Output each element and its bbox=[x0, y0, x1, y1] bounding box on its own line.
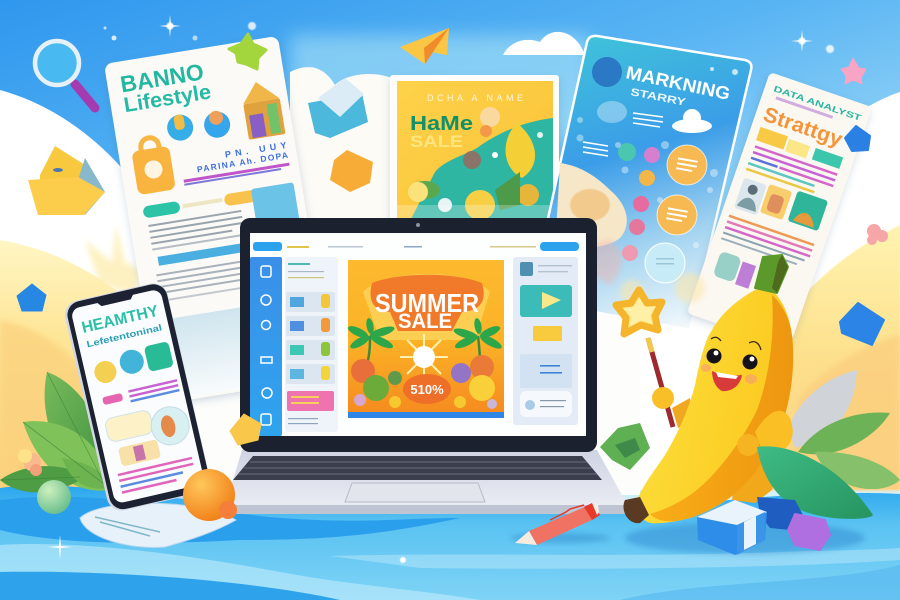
app sidebar bbox=[250, 257, 282, 436]
blue gem on poster bbox=[845, 126, 870, 151]
orange ball with knob bbox=[183, 469, 237, 521]
info circles bbox=[645, 145, 707, 283]
pencil bbox=[515, 503, 600, 545]
discount badge bbox=[403, 374, 451, 404]
phone diagrams bbox=[104, 401, 195, 468]
blue gift box bbox=[697, 500, 767, 555]
logo badge bbox=[592, 57, 622, 87]
phone body bbox=[62, 280, 213, 513]
green pen bbox=[757, 446, 873, 519]
poster: Marketing Starry: STARRY bbox=[629, 86, 687, 109]
banana stem bbox=[755, 255, 788, 293]
palm trees bbox=[346, 318, 503, 365]
app toolbar bbox=[253, 242, 579, 251]
summer sale poster bbox=[346, 260, 504, 418]
plant leaves on left bbox=[0, 372, 110, 492]
banana leg bbox=[732, 462, 775, 503]
floating blue envelope bbox=[308, 78, 368, 138]
pink star bbox=[841, 58, 866, 84]
floating paper plane bbox=[400, 28, 449, 64]
poster: Data Analyst Strategy bbox=[687, 72, 872, 348]
tablet header text: DCHA A NAME bbox=[427, 93, 523, 103]
banana end tip bbox=[623, 497, 649, 523]
illustration: tropical fruit bbox=[397, 107, 553, 221]
phone icons bbox=[91, 341, 174, 385]
phone stand bbox=[80, 503, 236, 547]
fruit bbox=[351, 355, 497, 409]
summer sale headline: SUMMER bbox=[375, 288, 479, 318]
green ball bbox=[37, 480, 71, 514]
phone coloured lines bbox=[100, 379, 199, 494]
tablet title: HaMe bbox=[410, 113, 473, 135]
green star bbox=[229, 34, 266, 69]
sparkles bbox=[48, 15, 834, 563]
banana body bbox=[638, 289, 793, 523]
summer sale poster: SALE bbox=[398, 310, 452, 333]
phone bbox=[62, 280, 236, 547]
icon: orange padlock bag bbox=[130, 135, 176, 195]
pale star blobs behind banana bbox=[620, 273, 705, 304]
discount badge: 510% bbox=[410, 382, 444, 397]
laptop base bbox=[222, 450, 636, 514]
poster subheading: PN. UUY bbox=[224, 140, 287, 160]
poster: BANNO Lifestyle: Lifestyle bbox=[122, 80, 213, 117]
banana face bbox=[701, 337, 761, 391]
floating orange gem bbox=[330, 150, 373, 192]
sun bbox=[400, 334, 448, 382]
banana shaded side bbox=[650, 295, 793, 521]
laptop bbox=[222, 218, 636, 514]
icon: colourful chart tower bbox=[240, 79, 286, 140]
dark blue block bbox=[757, 497, 803, 530]
coloured bars bbox=[721, 145, 839, 268]
laptop screen bezel bbox=[240, 218, 597, 452]
banana mascot bbox=[616, 255, 900, 555]
app right panel bbox=[513, 257, 578, 425]
phone title: HEAMTHY bbox=[80, 303, 160, 337]
wand bbox=[616, 290, 692, 428]
icons: round badges bbox=[165, 107, 232, 146]
poster: BANNO Lifestyle: PARINA Ah. DOPA bbox=[196, 150, 289, 174]
poster title: Strattgy bbox=[760, 103, 846, 152]
blue star gem bbox=[17, 284, 46, 311]
poster body text lines bbox=[142, 183, 307, 302]
paint blob at poster edge bbox=[555, 163, 627, 255]
trackpad bbox=[345, 483, 485, 502]
yellow folded box bbox=[28, 146, 105, 215]
poster title: BANNO bbox=[118, 58, 206, 97]
poster heading: DATA ANALYST bbox=[772, 83, 864, 123]
tablet poster: HaMe Sale: SALE bbox=[410, 132, 463, 151]
green crumpled shape bbox=[600, 423, 650, 470]
surfboard wing bbox=[788, 370, 857, 448]
title: MARKNING bbox=[624, 62, 732, 104]
yellow gem near laptop bbox=[230, 414, 261, 445]
keyboard bbox=[233, 456, 602, 480]
floating blue cube bbox=[840, 303, 884, 345]
poster: BANNO Lifestyle bbox=[104, 36, 333, 405]
laptop screen bbox=[250, 233, 586, 436]
purple cube bbox=[788, 514, 830, 550]
right leaves bbox=[798, 412, 900, 489]
small round icons bbox=[618, 143, 660, 261]
app list panel bbox=[285, 257, 338, 432]
magnifying glass bbox=[35, 41, 95, 108]
banana arm bbox=[737, 411, 793, 458]
picture tiles bbox=[710, 173, 828, 304]
poster: Marketing Starry bbox=[530, 36, 751, 330]
flower bbox=[18, 449, 42, 476]
coloured tags bbox=[756, 127, 844, 170]
phone subtitle: Lefetentoninal bbox=[86, 322, 163, 349]
pink puff bbox=[867, 224, 888, 245]
tablet poster: HaMe Sale bbox=[390, 75, 559, 225]
white text lines, cloud and dots bbox=[576, 67, 738, 248]
poster picture block bbox=[251, 182, 301, 234]
